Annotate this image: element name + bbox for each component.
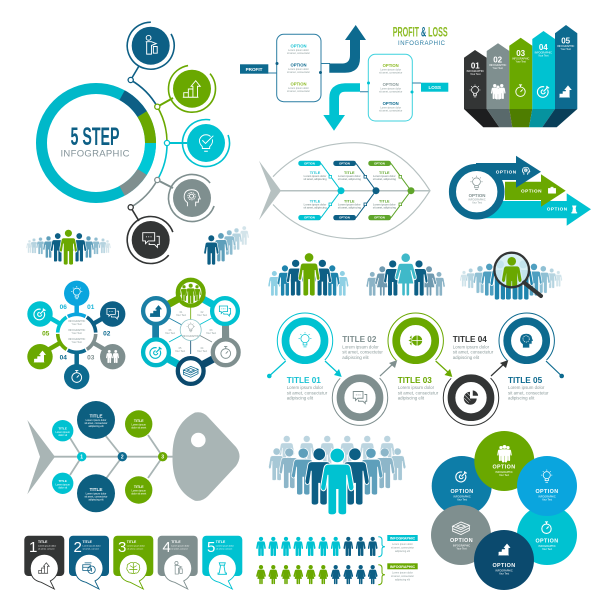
column 03: Your Text	[516, 60, 526, 64]
column 03: 03	[516, 49, 526, 58]
title 05 text: Lorem ipsum dolor	[508, 385, 545, 390]
title 02 text: Lorem ipsum dolor	[342, 344, 379, 349]
profit options text: sit amet, consectetur	[287, 90, 310, 93]
bone titles and text: sit amet, adipiscing	[373, 178, 396, 181]
bone titles and text: TITLE	[344, 200, 355, 204]
loss options text: OPTION	[383, 63, 399, 68]
title 03 text: sit amet, consectetur	[398, 390, 439, 395]
spine node 1: 1	[80, 455, 83, 461]
center text: Your Text	[72, 323, 82, 326]
step numbers: 03	[87, 354, 95, 362]
petal labels: Your Text	[176, 314, 186, 317]
column 01	[464, 50, 487, 109]
timeline circle 4	[432, 359, 510, 437]
option tags: OPTION	[304, 216, 315, 220]
card 5: Lorem ipsum dolor	[216, 544, 234, 548]
male figures	[256, 537, 378, 556]
brace	[378, 537, 385, 557]
title 03 text: TITLE 03	[398, 376, 432, 385]
fish tail	[259, 161, 281, 220]
arrow: profit up	[329, 25, 366, 73]
panel: five title timeline	[266, 302, 566, 437]
option: blue target: OPTION	[450, 489, 474, 495]
bone titles and text: Lorem ipsum dolor	[373, 204, 396, 207]
title 01 text	[287, 376, 328, 401]
bone titles and text: sit amet, adipiscing	[338, 178, 361, 181]
lower large blue circle: Lorem ipsum dolor	[86, 492, 107, 496]
loss options text: sit amet, consectetur	[379, 72, 402, 74]
card 5: 5	[207, 539, 215, 556]
petal labels: 01	[180, 311, 183, 314]
petal labels: 02	[201, 311, 204, 314]
option: light blue bulb: OPTION	[535, 489, 559, 495]
petal labels	[165, 311, 216, 353]
center text: Your Text	[72, 332, 82, 335]
label: loss	[421, 83, 448, 92]
label: sit amet, consectetur	[391, 546, 414, 550]
center text: INFOGRAPHIC	[68, 329, 86, 332]
petal labels: Your Text	[165, 332, 175, 335]
card 3	[113, 536, 153, 589]
bone titles and text: sit amet, adipiscing	[338, 207, 361, 210]
title 02 text	[342, 335, 383, 360]
profit options text: OPTION	[290, 82, 307, 86]
option: light blue bulb: Your Text	[542, 498, 552, 502]
title 04 text: adipiscing elit	[453, 355, 480, 360]
label: adipiscing elit	[395, 550, 410, 553]
loss options text: sit amet, consectetur	[379, 110, 402, 112]
step numbers: 06	[60, 304, 67, 311]
bone titles and text: sit amet, adipiscing	[373, 207, 396, 210]
panel: five rising arrow columns	[464, 25, 577, 127]
subtitle: infographic: INFOGRAPHIC	[398, 41, 446, 47]
card 2: sit amet, consect	[82, 548, 99, 550]
step numbers	[42, 304, 111, 362]
option: teal stopwatch: INFOGRAPHIC	[538, 545, 556, 548]
head with eye	[172, 412, 240, 501]
spine node 2	[118, 452, 127, 461]
timeline circle 3	[377, 302, 455, 380]
option: green people: OPTION	[492, 464, 516, 470]
spine node 3	[158, 452, 167, 461]
arrowheads and end dots	[267, 360, 564, 378]
option: gray money: OPTION	[450, 538, 473, 544]
title 03 text: adipiscing elit	[398, 396, 425, 401]
option tags: OPTION	[339, 216, 350, 220]
option: green people	[474, 431, 534, 491]
spine node 2: 2	[121, 455, 124, 461]
timeline circle 2	[321, 359, 399, 437]
bone titles and text: TITLE	[379, 200, 390, 204]
option: navy bars: Your Text	[499, 572, 509, 576]
petal labels: 03	[210, 329, 213, 332]
people group: fading row	[204, 226, 249, 265]
ring with option text: INFOGRAPHIC	[468, 198, 486, 202]
center text: INFOGRAPHIC	[68, 338, 86, 341]
option: gray money	[431, 505, 491, 565]
lower green circle: dolor sit amet	[131, 492, 147, 496]
title 03 text: Lorem ipsum dolor	[398, 385, 435, 390]
panel: female pictogram row	[256, 563, 418, 585]
petal labels: Your Text	[197, 314, 207, 317]
option: green people: Your Text	[499, 474, 509, 477]
ring with option text: OPTION	[469, 193, 485, 198]
panel: male pictogram row	[256, 535, 418, 557]
label: INFOGRAPHIC	[390, 565, 415, 569]
spine and bones	[50, 435, 175, 480]
card 4	[158, 536, 198, 589]
step 3 circle	[176, 113, 236, 173]
right options box	[368, 54, 412, 121]
card 2: TITLE	[82, 540, 93, 544]
bone titles and text: sit amet, adipiscing	[303, 207, 327, 210]
column 05: 05	[561, 36, 571, 46]
title 01 text: sit amet, consectetur	[287, 390, 328, 395]
panel: fish skeleton diagram	[27, 401, 239, 512]
title 02 text: adipiscing elit	[342, 355, 369, 360]
card 2: Lorem ipsum dolor	[82, 544, 101, 548]
loss options text: OPTION	[383, 101, 399, 106]
card 3: sit amet, consect	[127, 548, 144, 550]
lower green circle	[125, 476, 152, 504]
card 1: sit amet, consect	[38, 548, 55, 550]
step 1 circle	[119, 14, 183, 78]
profit options text: Lorem ipsum dolor	[288, 68, 309, 71]
connector arcs	[131, 66, 187, 221]
title 05 text: sit amet, consectetur	[508, 390, 549, 395]
arrow labels: OPTION	[521, 188, 542, 194]
column 05: INFOGRAPHIC	[557, 45, 575, 48]
label: loss: LOSS	[428, 85, 441, 90]
connector nodes	[128, 77, 170, 210]
tail	[27, 420, 55, 494]
step numbers: 05	[42, 330, 50, 338]
label: INFOGRAPHIC	[390, 536, 415, 540]
lower small cyan circle: dolor sit	[58, 486, 67, 490]
option tags: OPTION	[374, 216, 385, 220]
step numbers: 04	[60, 354, 67, 362]
arrow icons	[522, 167, 577, 213]
option: gray money: Your Text	[456, 548, 467, 550]
loss options text: Lorem ipsum dolor	[380, 88, 401, 90]
card 4: TITLE	[171, 540, 181, 544]
card 3: TITLE	[127, 540, 137, 544]
column 05: Your Text	[561, 48, 571, 51]
option tags: OPTION	[304, 161, 315, 165]
upper large blue circle: TITLE	[89, 414, 103, 418]
card 1: Lorem ipsum dolor	[38, 544, 56, 548]
card 4: 4	[162, 539, 171, 556]
profit options text: sit amet, consectetur	[287, 52, 310, 55]
column 03: INFOGRAPHIC	[512, 58, 530, 60]
column 04	[532, 31, 555, 109]
lower large blue circle: TITLE	[89, 487, 103, 492]
arrow: blue	[476, 156, 541, 188]
timeline connectors and arrows	[269, 361, 562, 376]
upper small cyan circle: Lorem ipsum	[55, 431, 70, 434]
bone titles and text	[303, 171, 396, 210]
people group: magnifying glass	[460, 253, 562, 300]
lower green circle: Lorem ipsum	[131, 490, 146, 492]
bone titles and text: Lorem ipsum dolor	[304, 204, 326, 207]
title 04 text	[453, 335, 494, 360]
lower small cyan circle: Lorem ipsum	[55, 484, 70, 486]
card 2	[69, 536, 109, 589]
arrow labels	[496, 170, 568, 212]
petal labels: 06	[169, 329, 172, 332]
step 2 circle	[159, 56, 225, 122]
bone titles and text: Lorem ipsum dolor	[373, 175, 396, 178]
step 4 circle	[162, 168, 222, 228]
title 05 text	[508, 376, 549, 401]
upper small cyan circle: dolor sit	[58, 434, 67, 437]
center text: INFOGRAPHIC	[68, 320, 86, 323]
upper large blue circle	[77, 401, 115, 439]
ring segments and stems	[43, 300, 110, 367]
profit options text: OPTION	[290, 62, 307, 68]
spine node 1	[77, 452, 86, 461]
title 03 text	[398, 376, 439, 401]
loss options text	[379, 63, 402, 112]
panel: six step flower	[27, 281, 125, 389]
bone titles and text: TITLE	[344, 171, 355, 175]
arrow: cyan	[476, 193, 591, 226]
spine nodes	[329, 176, 414, 206]
upper green circle: Lorem ipsum	[131, 424, 146, 426]
card 5	[202, 536, 242, 589]
center text: Your Text	[72, 341, 82, 344]
heading: 5 step: 5 STEP	[70, 123, 120, 151]
profit options text: Lorem ipsum dolor	[288, 49, 309, 52]
option tags: OPTION	[339, 161, 350, 165]
card 3: 3	[118, 539, 126, 556]
petal labels: Your Text	[175, 350, 185, 353]
fish body outline	[273, 143, 430, 239]
card 2: 2	[74, 539, 82, 556]
option: blue target: INFOGRAPHIC	[453, 496, 471, 498]
profit options text: OPTION	[290, 44, 307, 48]
lens	[494, 253, 529, 287]
people group: large crowd	[269, 436, 406, 515]
column 05	[555, 25, 577, 109]
label: sit amet, consectetur	[391, 575, 414, 578]
brace	[378, 565, 385, 585]
column 01: 01	[471, 62, 480, 70]
green person in lens	[502, 257, 522, 286]
connector lines	[268, 64, 421, 92]
option: teal stopwatch: OPTION	[535, 538, 559, 544]
column 04: Your Text	[538, 54, 549, 58]
petal labels: Your Text	[197, 350, 207, 353]
title 05 text: adipiscing elit	[508, 396, 535, 401]
people group: woman in center	[366, 253, 445, 296]
inner petals: INFOGRAPHIC	[182, 335, 200, 338]
card 4: sit amet, consect	[171, 548, 188, 550]
card 1	[24, 536, 64, 589]
title 04 text: TITLE 04	[453, 335, 487, 344]
title 01 text: TITLE 01	[287, 376, 321, 385]
label: adipiscing elit	[395, 578, 410, 581]
label	[387, 535, 418, 553]
ring with option text: Your Text	[472, 202, 482, 204]
upper green circle	[125, 410, 152, 438]
upper large blue circle: Lorem ipsum dolor	[86, 419, 107, 422]
title 04 text: Lorem ipsum dolor	[453, 344, 490, 349]
label: profit	[240, 64, 268, 74]
left options box	[277, 34, 321, 102]
column shadows	[464, 109, 577, 127]
loss options text: OPTION	[383, 82, 399, 87]
petal labels: 05	[179, 347, 182, 350]
option tags	[298, 161, 391, 220]
lower large blue circle	[77, 474, 115, 512]
upper green circle: TITLE	[134, 419, 144, 423]
card 1: TITLE	[38, 540, 48, 544]
hexagon circles	[143, 280, 239, 384]
spine node 3: 3	[161, 455, 164, 461]
profit options text: sit amet, consectetur	[287, 71, 310, 74]
column 02: Your Text	[493, 67, 503, 70]
option: teal stopwatch: Your Text	[542, 548, 552, 551]
spine	[275, 190, 430, 192]
option: light blue bulb: INFOGRAPHIC	[538, 496, 556, 498]
bone titles and text: TITLE	[310, 171, 321, 175]
card 5: TITLE	[216, 540, 226, 544]
female figures	[256, 565, 378, 584]
title 01 text: Lorem ipsum dolor	[287, 385, 324, 390]
option: navy bars: INFOGRAPHIC	[495, 570, 513, 572]
upper small cyan circle	[52, 420, 73, 441]
petal labels: 04	[201, 347, 204, 350]
bone titles and text: sit amet, adipiscing	[303, 178, 327, 181]
loss options text: Lorem ipsum dolor	[380, 106, 401, 110]
card 4: Lorem ipsum dolor	[171, 544, 190, 548]
option tags: OPTION	[374, 161, 385, 165]
option: navy bars	[474, 530, 534, 590]
option: teal stopwatch	[517, 505, 577, 565]
lower small cyan circle	[52, 473, 73, 494]
subheading: infographic: INFOGRAPHIC	[60, 148, 130, 160]
bone titles and text: TITLE	[310, 200, 321, 204]
profit options text	[287, 44, 310, 93]
people group: green leader	[26, 229, 111, 265]
title 02 text: TITLE 02	[342, 335, 377, 344]
title 04 text: sit amet, consectetur	[453, 350, 494, 354]
hexagon band	[156, 293, 226, 371]
loss options text: sit amet, consectetur	[379, 90, 402, 94]
panel: profit and loss flow	[240, 25, 448, 131]
lower small cyan circle: TITLE	[59, 479, 67, 483]
option: blue target: Your Text	[457, 498, 467, 502]
column 01: Your Text	[470, 73, 481, 76]
bone titles and text: Lorem ipsum dolor	[338, 175, 361, 178]
title 05 text: TITLE 05	[508, 376, 543, 385]
panel: three arrows from circle	[452, 156, 591, 226]
panel: 5 step circular infographic	[42, 14, 236, 273]
petal labels: Your Text	[206, 332, 216, 335]
people group: man in center	[268, 253, 349, 296]
option: gray money: INFOGRAPHIC	[453, 544, 470, 548]
arrow: green	[505, 174, 566, 207]
main ring	[42, 88, 150, 198]
column 02	[487, 43, 509, 109]
option: navy bars: OPTION	[492, 563, 516, 569]
title 01 text: adipiscing elit	[287, 396, 314, 401]
panel: six overlapping option circles	[431, 431, 577, 590]
timeline circle 5	[488, 302, 566, 380]
lower large blue circle: adipiscing elit	[88, 498, 104, 502]
label: profit: PROFIT	[246, 67, 263, 72]
bone titles and text: TITLE	[379, 171, 390, 175]
loss options text: Lorem ipsum dolor	[380, 68, 401, 72]
card 5: sit amet, consect	[216, 548, 233, 550]
label: Lorem ipsum dolor	[392, 571, 413, 574]
profit options text: Lorem ipsum dolor	[288, 87, 309, 90]
option: green people: INFOGRAPHIC	[495, 471, 513, 474]
upper large blue circle: adipiscing elit	[88, 425, 104, 428]
arrow: loss down	[323, 83, 360, 131]
label: Lorem ipsum dolor	[392, 543, 413, 546]
panel: numbered title cards	[24, 536, 242, 589]
lower large blue circle: sit amet, consectetur	[84, 496, 108, 498]
arrow labels: OPTION	[496, 170, 517, 174]
timeline circle 1	[266, 302, 344, 380]
bones	[321, 163, 411, 218]
upper green circle: dolor sit amet	[131, 426, 147, 430]
panel: fishbone lens diagram	[259, 143, 430, 239]
ring with option text	[452, 167, 501, 216]
card 1: 1	[29, 539, 37, 556]
bone titles and text: Lorem ipsum dolor	[304, 175, 326, 178]
column 03	[509, 38, 532, 109]
column 04: INFOGRAPHIC	[535, 52, 552, 54]
flower circles	[27, 281, 125, 389]
step 5 circle	[118, 207, 184, 273]
lower green circle: TITLE	[134, 485, 144, 489]
bone titles and text: Lorem ipsum dolor	[338, 204, 361, 207]
label	[387, 563, 418, 581]
column 02: INFOGRAPHIC	[489, 64, 507, 67]
node dots	[276, 62, 414, 94]
step numbers: 02	[103, 330, 111, 338]
upper small cyan circle: TITLE	[59, 426, 67, 430]
option: light blue bulb	[517, 456, 577, 516]
panel: hexagon ring diagram	[143, 280, 239, 384]
lens rim and handle	[494, 253, 541, 296]
title 02 text: sit amet, consectetur	[342, 350, 383, 354]
option: blue target	[432, 456, 492, 516]
column 01: INFOGRAPHIC	[467, 70, 484, 73]
upper large blue circle: sit amet, consectetur	[84, 422, 108, 425]
title: profit and loss: PROFIT & LOSS	[393, 25, 448, 40]
column 04: 04	[539, 43, 548, 52]
arrow labels: OPTION	[547, 206, 568, 212]
column 02: 02	[493, 56, 503, 64]
center text	[68, 320, 86, 344]
card 3: Lorem ipsum dolor	[127, 544, 145, 548]
step numbers: 01	[87, 304, 95, 311]
